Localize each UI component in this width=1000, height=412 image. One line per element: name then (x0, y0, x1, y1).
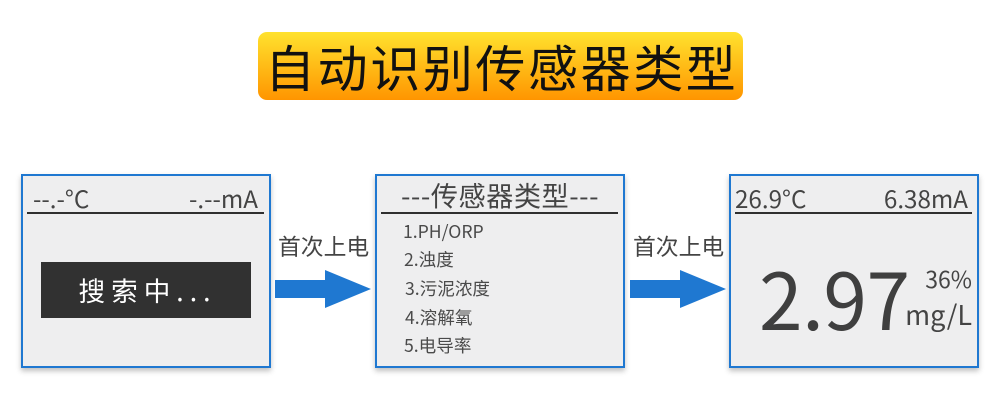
panel 3 current reading: 6.38mA (884, 180, 968, 215)
main value: 2.97 (759, 239, 910, 353)
list item 4: 4.溶解氧 (405, 305, 472, 330)
label: first power-on 1: 首次上电 (278, 229, 369, 262)
percent value: 36% (925, 261, 972, 295)
unit: mg/L (905, 294, 972, 333)
list item 3: 3.污泥浓度 (405, 276, 490, 301)
panel 1 temperature reading: --.-°C (33, 180, 89, 215)
panel 3 divider (735, 212, 972, 214)
arrow 2 (630, 270, 726, 308)
label: first power-on 2: 首次上电 (633, 229, 724, 262)
panel: measurement display (729, 174, 979, 368)
panel: searching (21, 174, 271, 368)
panel 2 heading: ---传感器类型--- (401, 174, 599, 214)
panel 1 searching status box (41, 262, 251, 318)
panel: sensor type list (375, 174, 625, 368)
panel 3 temperature reading: 26.9°C (735, 180, 806, 215)
arrow 1 (275, 270, 371, 308)
list item 2: 2.浊度 (404, 247, 454, 272)
panel 1 searching status box: 搜索中... (79, 270, 216, 309)
panel 1 current reading: -.--mA (189, 180, 258, 215)
panel 2 divider (381, 212, 618, 214)
panel 1 divider (27, 212, 264, 214)
list item 1: 1.PH/ORP (403, 219, 484, 244)
list item 5: 5.电导率 (404, 333, 471, 358)
title: 自动识别传感器类型 (265, 30, 738, 102)
